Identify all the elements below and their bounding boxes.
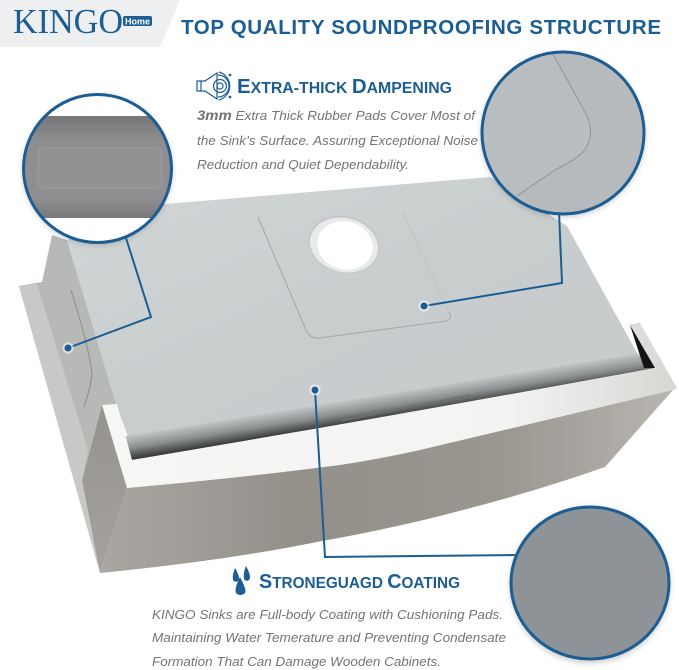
logo banner <box>0 0 180 47</box>
callout line: left pad <box>62 238 151 354</box>
body text: the Sink’s Surface. Assuring Exceptional Noise <box>197 133 478 148</box>
sink photo <box>19 177 677 573</box>
sink corner wedge <box>82 405 127 573</box>
magnifier circle: left pad <box>20 94 180 245</box>
body text: Formation That Can Damage Wooden Cabinets. <box>152 654 441 669</box>
magnifier circle: coating <box>510 507 670 663</box>
body text: Maintaining Water Temerature and Preventing Condensate <box>152 630 506 645</box>
sink top panel <box>67 177 637 437</box>
sink apron lip <box>102 323 677 488</box>
body text: 3mm Extra Thick Rubber Pads Cover Most of <box>197 107 477 123</box>
section: extra-thick dampening <box>197 72 478 172</box>
body text <box>152 607 506 669</box>
magnifier circle: pad corner <box>470 50 645 217</box>
section: stroneguagd coating <box>152 566 506 669</box>
callout line: coating <box>310 384 515 557</box>
sink apron face <box>100 390 673 573</box>
sink inner shadow band <box>120 353 655 460</box>
sink side flange <box>19 235 117 573</box>
body text: KINGO Sinks are Full-body Coating with Cushioning Pads. <box>152 607 503 622</box>
icon: water drops <box>233 566 250 595</box>
body text: Reduction and Quiet Dependability. <box>197 157 409 172</box>
drain pad outline <box>258 213 450 338</box>
icon: speaker with sound waves <box>197 72 231 100</box>
logo wordmark: KINGO <box>13 2 123 41</box>
heading: EXTRA-THICK DAMPENING <box>237 76 452 98</box>
heading: STRONEGUAGD COATING <box>259 571 460 593</box>
title: TOP QUALITY SOUNDPROOFING STRUCTURE <box>181 16 661 39</box>
body text <box>197 107 478 172</box>
logo home tag: Home <box>125 16 150 26</box>
callout line: drain pad <box>418 212 562 312</box>
drain hole <box>302 208 386 281</box>
sink underside slot <box>340 395 470 421</box>
